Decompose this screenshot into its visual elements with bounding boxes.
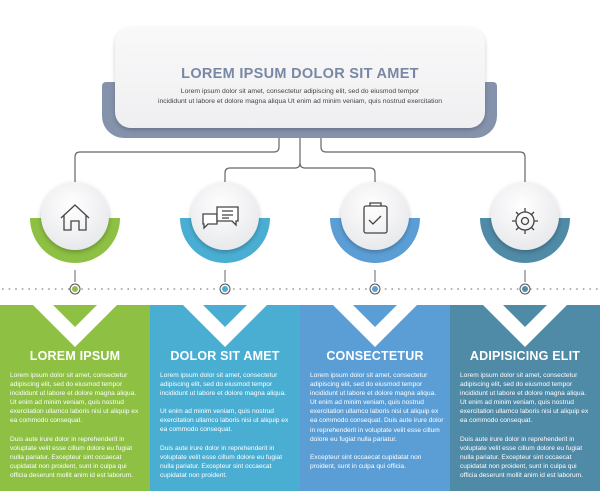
- dotted line: [2, 288, 600, 290]
- subtitle: Lorem ipsum dolor sit amet, consectetur adipiscing elit, sed do eiusmod tempor: [181, 88, 419, 95]
- panel 1: Lorem ipsum dolor sit amet, consectetur adipiscing elit, sed do eiusmod tempor incididunt ut labore et dolore magna aliqua. Ut enim ad minim veniam, quis nostrud exercitation ullamco laboris nisi ut aliquip ex ea commodo consequat.: [10, 372, 138, 424]
- panel 2: Ut enim ad minim veniam, quis nostrud exercitation ullamco laboris nisi ut aliquip ex ea commodo consequat.: [160, 408, 288, 433]
- panel 2: DOLOR SIT AMET: [170, 349, 280, 363]
- panel 3: CONSECTETUR: [326, 349, 424, 363]
- panel 1: Duis aute irure dolor in reprehenderit in voluptate velit esse cillum dolore eu fugiat nulla pariatur. Excepteur sint occaecat cupidatat non proident, sunt in culpa qui officia deserunt mollit anim id est laborum.: [10, 436, 133, 479]
- step 1 circle: [30, 182, 120, 294]
- panel 4: Lorem ipsum dolor sit amet, consectetur adipiscing elit, sed do eiusmod tempor incididunt ut labore et dolore magna aliqua. Ut enim ad minim veniam, quis nostrud exercitation ullamco laboris nisi ut aliquip ex ea commodo consequat.: [460, 372, 588, 424]
- header box: [102, 82, 497, 138]
- panel 1: LOREM IPSUM: [30, 349, 120, 363]
- panel 2: Duis aute irure dolor in reprehenderit in voluptate velit esse cillum dolore eu fugiat nulla pariatur. Excepteur sint occaecat cupidatat non proident.: [160, 445, 282, 479]
- chevrons: [33, 305, 567, 347]
- subtitle: incididunt ut labore et dolore magna aliqua Ut enim ad minim veniam, quis nostrud exercitation: [158, 98, 442, 104]
- panel 3: [300, 305, 450, 491]
- title: LOREM IPSUM DOLOR SIT AMET: [181, 66, 419, 82]
- panel 4: ADIPISICING ELIT: [470, 349, 580, 363]
- panel 4: Duis aute irure dolor in reprehenderit in voluptate velit esse cillum dolore eu fugiat nulla pariatur. Excepteur sint occaecat cupidatat non proident, sunt in culpa qui officia deserunt mollit anim id est laborum.: [460, 436, 583, 479]
- panel 2: [150, 305, 300, 491]
- panel 2: Lorem ipsum dolor sit amet, consectetur adipiscing elit, sed do eiusmod tempor incididunt ut labore et dolore magna aliqua.: [160, 372, 286, 397]
- subtitle: [158, 88, 442, 104]
- panel 1: [0, 305, 150, 491]
- step 4 circle: [480, 182, 570, 294]
- panel 3: Excepteur sint occaecat cupidatat non proident, sunt in culpa qui officia.: [310, 454, 421, 470]
- panel 3: Lorem ipsum dolor sit amet, consectetur adipiscing elit, sed do eiusmod tempor incididunt ut labore et dolore magna aliqua. Ut enim ad minim veniam, quis nostrud exercitation ullamco laboris nisi ut aliquip ex ea commodo consequat. Duis aute irure dolor in reprehenderit in voluptate velit esse cillum dolore eu fugiat nulla pariatur.: [310, 372, 443, 443]
- step 2 circle: [180, 182, 270, 294]
- step 3 circle: [330, 182, 420, 294]
- panel 4: [450, 305, 600, 491]
